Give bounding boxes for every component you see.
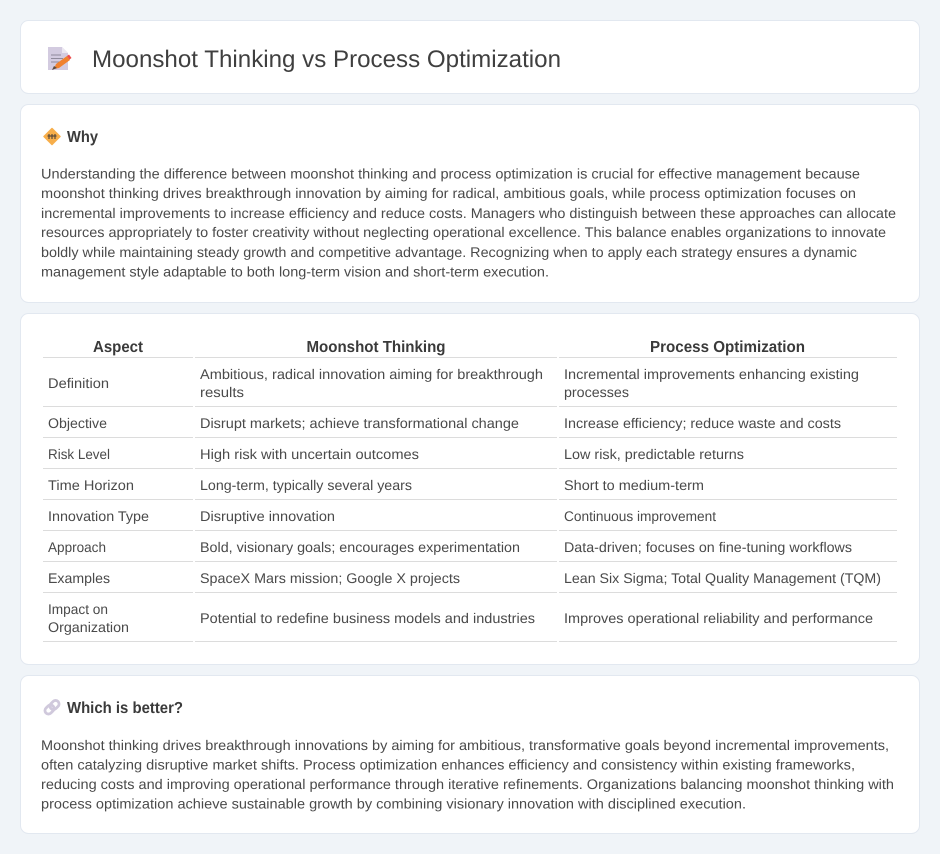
row: objective: Disrupt markets; achieve transformational change	[200, 415, 519, 431]
text block: which is better paragraph: often catalyzing disruptive market shifts. Process optimization enhances efficiency and consistency within existing frameworks,	[41, 756, 855, 772]
row: time horizon	[48, 477, 704, 493]
row: examples	[48, 570, 881, 586]
text block: why paragraph: resources appropriately to foster creativity without neglecting operational excellence. This balance enables organizations to innovate	[41, 224, 886, 240]
text block: why paragraph	[41, 166, 896, 280]
text block: why paragraph: Understanding the difference between moonshot thinking and process optimization is crucial for effective management because	[41, 166, 860, 182]
row: approach: Data-driven; focuses on fine-tuning workflows	[564, 539, 852, 555]
row: definition: results	[200, 384, 244, 400]
row: approach: Approach	[48, 539, 106, 555]
row: time horizon: Long-term, typically several years	[200, 477, 412, 493]
title: Moonshot Thinking vs Process Optimization	[92, 46, 561, 73]
row: risk level: Risk Level	[48, 446, 110, 462]
row: risk level: High risk with uncertain outcomes	[200, 446, 419, 462]
row: innovation type	[48, 508, 716, 524]
text block: why paragraph: moonshot thinking drives breakthrough innovation by aiming for radical, ambitious goals, while process optimization focuses on	[41, 185, 856, 201]
row: examples: Lean Six Sigma; Total Quality Management (TQM)	[564, 570, 881, 586]
text block: which is better paragraph: reducing costs and improving operational performance through iterative refinements. Organizations balancing moonshot thinking with	[41, 776, 894, 792]
panel: which is better	[20, 676, 920, 834]
row: definition: Definition	[48, 375, 109, 391]
table header: Moonshot Thinking	[306, 339, 446, 356]
row: impact on organization: Potential to redefine business models and industries	[200, 610, 535, 626]
row: examples: SpaceX Mars mission; Google X projects	[200, 570, 460, 586]
row: approach: Bold, visionary goals; encourages experimentation	[200, 539, 520, 555]
icon: diamond sign	[44, 128, 60, 144]
row: definition: Incremental improvements enhancing existing	[564, 366, 859, 382]
row: impact on organization	[48, 601, 873, 635]
row: definition: Ambitious, radical innovation aiming for breakthrough	[200, 366, 543, 382]
text block: which is better paragraph	[41, 737, 894, 812]
panel: title header	[20, 20, 920, 94]
row: approach	[48, 539, 852, 555]
icon: chain link	[43, 699, 61, 716]
row: risk level: Low risk, predictable returns	[564, 446, 744, 462]
row: objective	[48, 415, 841, 431]
row: impact on organization: Improves operational reliability and performance	[564, 610, 873, 626]
row: definition: processes	[564, 384, 629, 400]
panel: comparison table	[20, 314, 920, 664]
text block: why paragraph: management style adaptable to both long-term vision and short-term execution.	[41, 264, 549, 280]
heading: why: Why	[67, 129, 98, 146]
row: examples: Examples	[48, 570, 110, 586]
row: definition	[48, 366, 859, 400]
row: impact on organization: Organization	[48, 619, 129, 635]
table header: Aspect	[93, 339, 144, 356]
text block: which is better paragraph: process optimization achieve sustainable growth by combining visionary innovation with disciplined execution.	[41, 796, 746, 812]
row: time horizon: Time Horizon	[48, 477, 134, 493]
row: impact on organization: Impact on	[48, 601, 108, 617]
table header: Process Optimization	[650, 339, 805, 356]
text block: why paragraph: boldly while maintaining steady growth and competitive advantage. Recognizing when to apply each strategy ensures a dynamic	[41, 244, 857, 260]
text block: which is better paragraph: Moonshot thinking drives breakthrough innovations by aiming for ambitious, transformative goals beyond incremental improvements,	[41, 737, 889, 753]
panel: why	[20, 104, 920, 302]
heading: which is better: Which is better?	[67, 700, 183, 717]
row: objective: Increase efficiency; reduce waste and costs	[564, 415, 841, 431]
row: objective: Objective	[48, 415, 107, 431]
row: innovation type: Innovation Type	[48, 508, 149, 524]
icon: document with pencil	[48, 47, 72, 70]
row: time horizon: Short to medium-term	[564, 477, 704, 493]
table header	[93, 339, 805, 356]
row: risk level	[48, 446, 744, 462]
text block: why paragraph: incremental improvements to increase efficiency and reduce costs. Managers who distinguish between these approaches can allocate	[41, 205, 896, 221]
row: innovation type: Continuous improvement	[564, 508, 716, 524]
row: innovation type: Disruptive innovation	[200, 508, 335, 524]
